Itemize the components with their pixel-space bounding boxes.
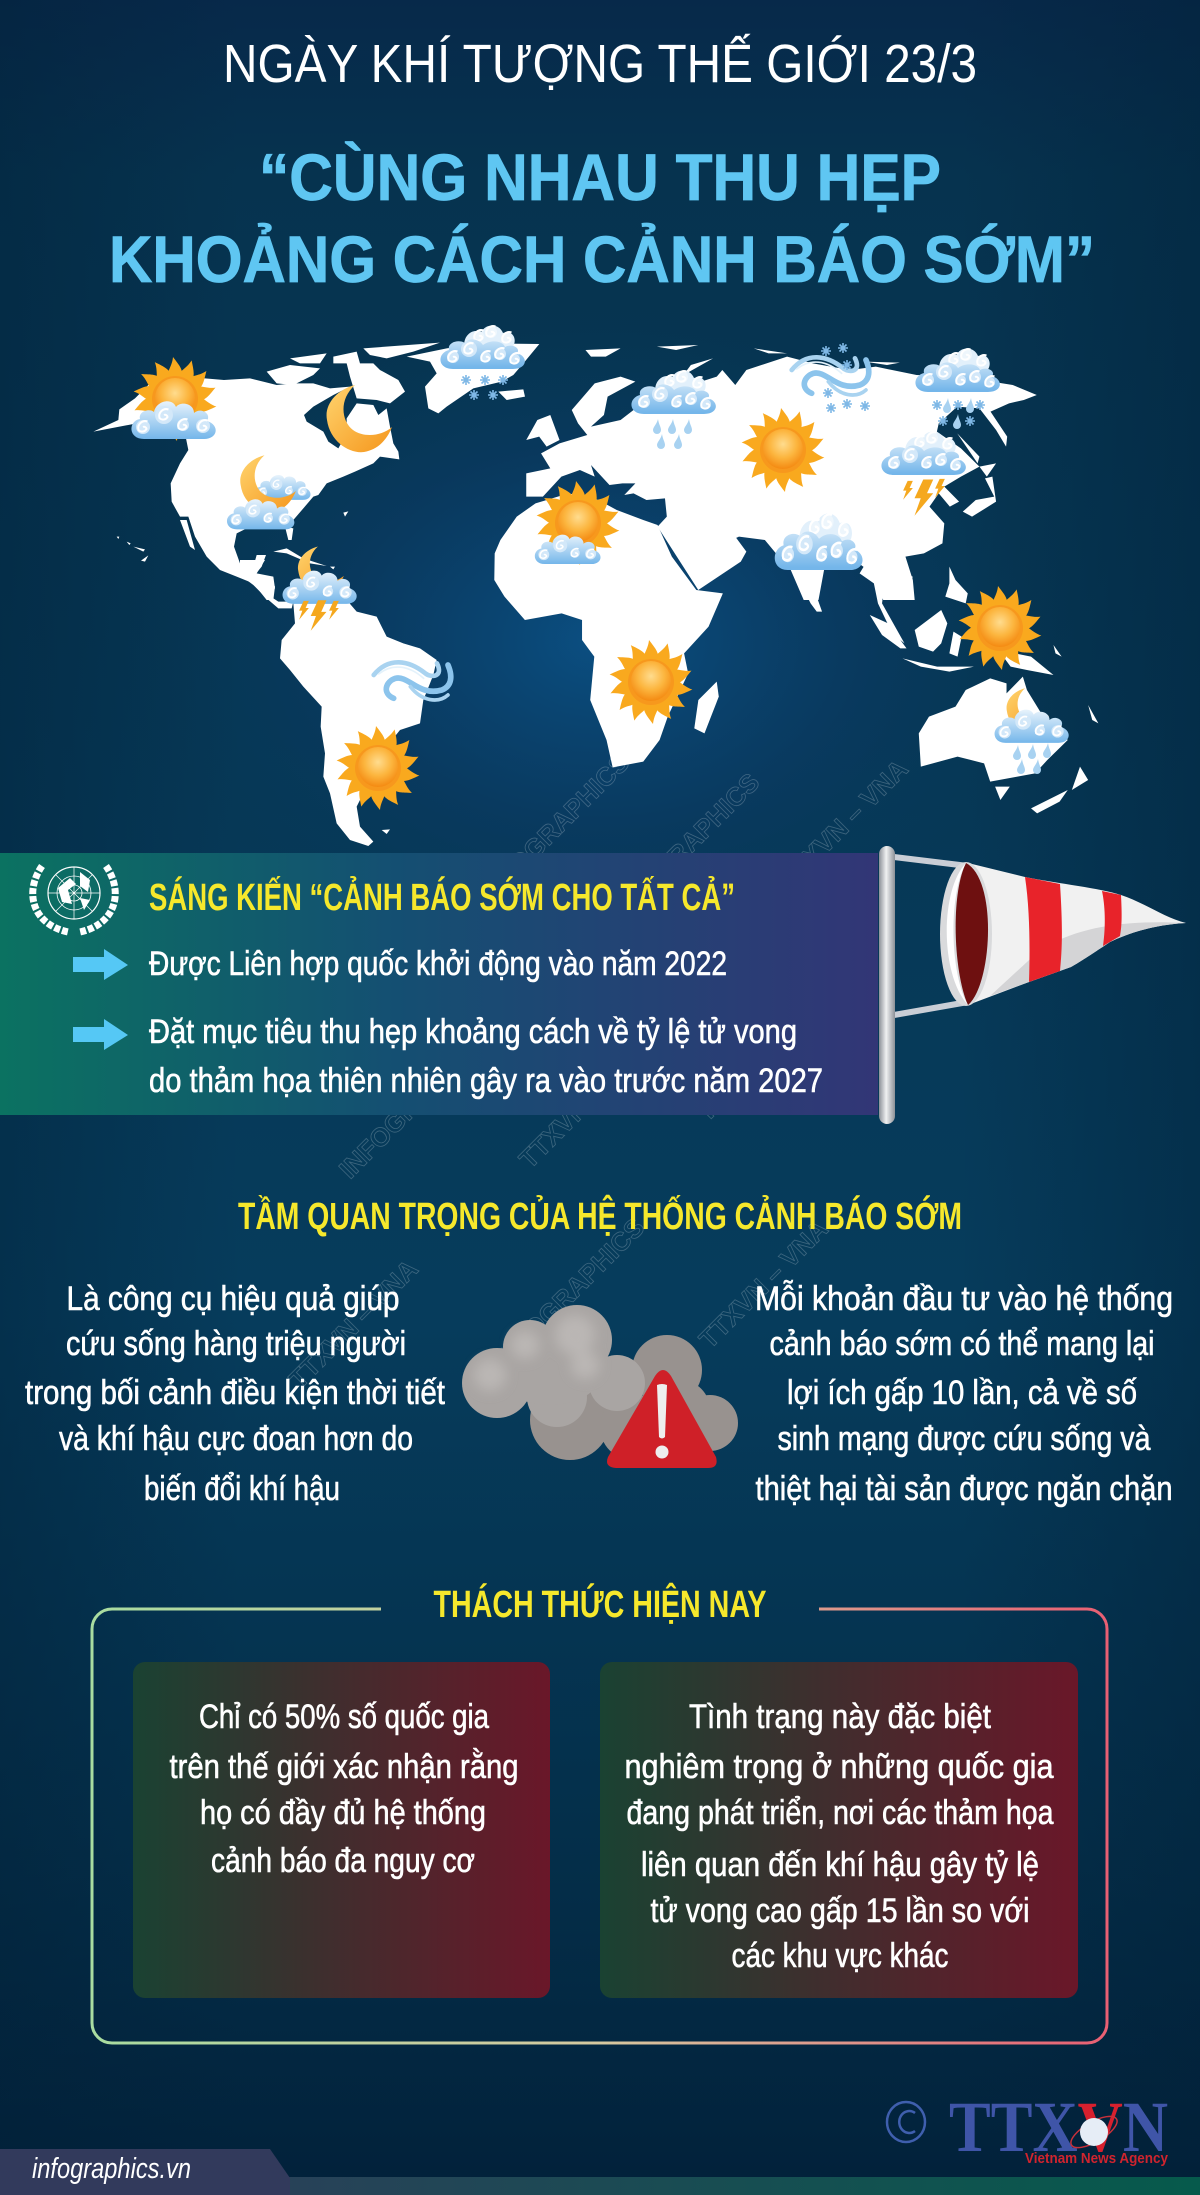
- watermarks: INFOGRAPHICS: [473, 747, 635, 909]
- icon: moon, cloud and rain Australia: [995, 688, 1069, 774]
- logo: TTXVN: Vietnam News Agency: [1025, 2150, 1169, 2167]
- watermarks: INFOGRAPHICS: [488, 1212, 650, 1374]
- source text: infographics.vn: [32, 2153, 191, 2185]
- watermarks: TTXVN – VNA: [283, 1253, 424, 1394]
- icon: cloud with warning: [462, 1305, 738, 1468]
- icon: moon and cloud USA: [227, 455, 311, 529]
- card: developing countries: nghiêm trọng ở những quốc gia: [624, 1748, 1054, 1786]
- watermarks: TTXVN – VNA: [693, 1213, 834, 1354]
- card: developing countries: đang phát triển, nơi các thảm họa: [626, 1794, 1054, 1832]
- title line: slogan 2: KHOẢNG CÁCH CẢNH BÁO SỚM”: [109, 222, 1095, 296]
- frame: [92, 1609, 1107, 2043]
- map: Africa, Southeast Asia, Australia: [494, 493, 1098, 813]
- text block: right: lợi ích gấp 10 lần, cả về số: [787, 1374, 1137, 1412]
- icon: rain cloud Europe: [631, 370, 716, 449]
- text block: left: biến đổi khí hậu: [144, 1470, 340, 1508]
- text block: right: [755, 1280, 1173, 1508]
- map: Central and South America: [240, 560, 437, 846]
- card: developing countries: các khu vực khác: [732, 1937, 948, 1975]
- panel heading: SÁNG KIẾN “CẢNH BÁO SỚM CHO TẤT CẢ”: [149, 875, 735, 919]
- icon: sun and cloud Sahara: [535, 481, 621, 565]
- text: launched: Được Liên hợp quốc khởi động vào năm 2022: [149, 945, 727, 983]
- warning triangle: [607, 1370, 717, 1468]
- title: [109, 34, 1095, 296]
- text: goal: do thảm họa thiên nhiên gây ra vào trước năm 2027: [149, 1062, 823, 1100]
- icon: arrow 2: [73, 1019, 128, 1050]
- weather icons: [131, 326, 1069, 810]
- icon: wind and snow Siberia: [792, 343, 870, 413]
- card: 50 percent: Chỉ có 50% số quốc gia: [199, 1698, 489, 1736]
- text block: left: Là công cụ hiệu quả giúp: [66, 1280, 400, 1318]
- map: Eurasia: [526, 345, 1037, 600]
- panel: initiative: [0, 853, 878, 1115]
- copyright sign: [887, 2102, 925, 2142]
- card: developing countries: Tình trạng này đặc biệt: [689, 1698, 991, 1736]
- heading: importance: TẦM QUAN TRỌNG CỦA HỆ THỐNG CẢNH BÁO SỚM: [238, 1193, 962, 1238]
- text block: left: trong bối cảnh điều kiện thời tiết: [25, 1374, 445, 1412]
- icon: wind Brazil: [374, 662, 451, 700]
- world map: [93, 343, 1098, 846]
- title line: date: NGÀY KHÍ TƯỢNG THẾ GIỚI 23/3: [223, 34, 977, 94]
- panel: current challenges: [92, 1582, 1107, 2043]
- card: developing countries: [600, 1662, 1078, 1998]
- text block: left: và khí hậu cực đoan hơn do: [59, 1420, 413, 1458]
- icon: sun Indonesia: [957, 586, 1043, 670]
- text block: left: [25, 1280, 445, 1508]
- icon: sun southern Africa: [608, 640, 694, 724]
- watermarks: INFOGRAPHICS: [333, 1022, 495, 1184]
- icon: sun and cloud Alaska: [131, 357, 218, 441]
- text block: left: cứu sống hàng triệu người: [66, 1325, 406, 1363]
- icon: cloud India: [775, 513, 863, 570]
- title line: slogan 1: “CÙNG NHAU THU HẸP: [259, 140, 941, 214]
- watermarks: INFOGRAPHICS: [603, 767, 765, 929]
- map: North America and Greenland: [93, 343, 539, 600]
- icon: UN emblem: [33, 866, 115, 932]
- icon: snow cloud Far East: [915, 348, 1000, 429]
- heading: challenges: THÁCH THỨC HIỆN NAY: [434, 1582, 766, 1626]
- icon: moon Canada: [327, 385, 392, 452]
- logo: TTXVN: TTXVN: [949, 2087, 1168, 2167]
- watermarks: [283, 747, 914, 1394]
- card: 50 percent: trên thế giới xác nhận rằng: [170, 1748, 518, 1786]
- card: developing countries: liên quan đến khí hậu gây tỷ lệ: [641, 1846, 1039, 1884]
- icon: arrow 1: [73, 949, 128, 980]
- watermarks: INFOGRAPHICS: [693, 962, 855, 1124]
- windsock: [879, 846, 1186, 1124]
- icon: lightning cloud China: [881, 432, 966, 516]
- watermarks: TTXVN – VNA: [773, 753, 914, 894]
- card: 50 percent: cảnh báo đa nguy cơ: [211, 1842, 475, 1880]
- card: 50 percent: [133, 1662, 550, 1998]
- footer: [0, 2087, 1200, 2195]
- text: goal: Đặt mục tiêu thu hẹp khoảng cách về tỷ lệ tử vong: [149, 1013, 797, 1051]
- icon: moon, cloud and lightning Central America: [283, 546, 357, 631]
- icon: snow cloud Greenland: [440, 326, 525, 400]
- icon: sun South America: [335, 726, 421, 810]
- text: goal: [149, 1013, 823, 1100]
- icon: sun Russia: [740, 408, 826, 492]
- watermarks: TTXVN – VNA: [513, 1033, 654, 1174]
- card: developing countries: tử vong cao gấp 15 lần so với: [650, 1892, 1030, 1930]
- card: 50 percent: họ có đầy đủ hệ thống: [200, 1794, 486, 1832]
